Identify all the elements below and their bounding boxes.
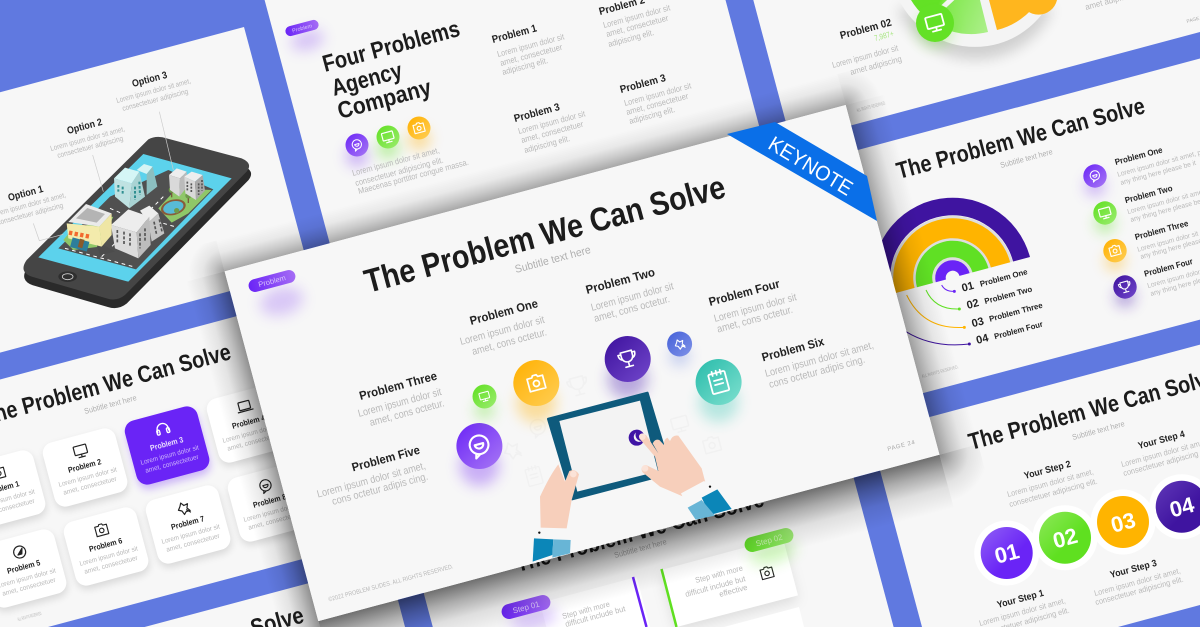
- ribbon: keynote: [727, 122, 877, 221]
- problem 3 left: amet, consectetuer: [520, 119, 584, 145]
- card: next step: [724, 607, 804, 627]
- copyright: ALL RIGHTS RESERVED.: [921, 364, 959, 380]
- tag pill: [247, 268, 306, 322]
- problem 3 right: amet, consectetuer: [625, 91, 689, 117]
- icon: green monitor large: [916, 4, 954, 47]
- step circle 03: 03: [1108, 507, 1138, 538]
- card: problem 3 highlighted: Lorem ipsum dolor sit: [140, 444, 200, 467]
- your step 2: Lorem ipsum dolor sit amet,: [1006, 467, 1094, 499]
- rainbow legend: Problem Four: [993, 320, 1044, 341]
- list item: problem one: any thing here please be it: [1120, 160, 1197, 187]
- option 2 label: consectetuer adipiscing: [56, 134, 124, 160]
- your step 2: consectetuer adipiscing elit.: [1008, 477, 1098, 509]
- your step 4: Your Step 4: [1137, 429, 1187, 452]
- tag pill: Problem: [257, 273, 287, 289]
- icon: orange circle: [1020, 0, 1057, 15]
- problem 2: Lorem ipsum dolor sit: [602, 2, 672, 30]
- option 3 label: [115, 70, 192, 113]
- problem 3 right: Problem 3: [619, 72, 667, 96]
- problem six: Problem Six: [760, 334, 826, 364]
- rainbow connector arcs: [906, 285, 971, 345]
- problem 3 right: [619, 72, 693, 126]
- ribbon: keynote: KEYNOTE: [764, 132, 857, 200]
- icon: orange camera: [408, 116, 430, 150]
- list item: problem one: Problem One: [1114, 145, 1164, 167]
- problem 1: adipiscing elit.: [501, 55, 549, 77]
- option 2 label: Lorem ipsum dolor sit amet,: [49, 124, 126, 153]
- card: problem 6: amet, consectetuer: [84, 555, 139, 576]
- donut chart: [897, 0, 1053, 59]
- card: step 02: effective: [718, 583, 749, 599]
- your step 4: [1120, 429, 1200, 478]
- card: step 02: [661, 537, 798, 627]
- problem 1: Lorem ipsum dolor sit: [496, 31, 566, 59]
- intro text: Maecenas porttitor congue massa.: [357, 157, 470, 196]
- card: problem 3 highlighted: [122, 404, 213, 492]
- card: problem 6: [61, 505, 152, 592]
- card: problem 7: amet, consectetuer: [166, 533, 221, 554]
- problem 3 right: Lorem ipsum dolor sit: [623, 80, 693, 108]
- heading: four problems agency company: [320, 15, 462, 124]
- title: The Problem We Can Solve: [360, 168, 729, 300]
- icon: green monitor: [376, 126, 400, 159]
- card: problem 7: [143, 483, 234, 570]
- your step 1: Lorem ipsum dolor sit amet,: [978, 596, 1066, 627]
- panel: card grid slide: [0, 295, 381, 627]
- problem four: Problem Four: [707, 276, 782, 309]
- card: step 02: Step with more: [694, 563, 744, 585]
- option 2 label: Option 2: [66, 117, 104, 137]
- problem 02 label: [831, 17, 903, 77]
- problem two: amet, cons octetur.: [593, 293, 671, 325]
- step circle 02: [1032, 505, 1098, 570]
- option 1 label: [0, 184, 67, 227]
- problem five: cons octetur adipis cing.: [331, 471, 429, 508]
- icon: teal clipboard: [696, 359, 742, 422]
- problem five: Problem Five: [350, 443, 422, 474]
- problem 3 left: [513, 101, 587, 155]
- problem two: Lorem ipsum dolor sit: [590, 280, 675, 314]
- problem two: [584, 265, 675, 325]
- rainbow legend: 02: [965, 297, 980, 312]
- problem 02 label: Lorem ipsum dolor sit: [831, 43, 900, 70]
- icon: green monitor: [1093, 201, 1117, 233]
- step circle 03: [1090, 490, 1156, 554]
- faint background icons: [503, 375, 722, 487]
- rainbow legend: 03: [970, 315, 985, 330]
- card: problem 5: Problem 5: [6, 558, 42, 576]
- problem 02 label: Problem 02: [839, 17, 893, 42]
- card: problem 1: [0, 448, 49, 535]
- problem four: [707, 276, 798, 335]
- step circle 04: 04: [1167, 492, 1198, 522]
- list item: problem two: Problem Two: [1124, 183, 1174, 205]
- subtitle: Subtitle text here: [1071, 419, 1126, 442]
- subtitle: Subtitle text here: [514, 244, 592, 276]
- problem 2: amet, consectetuer: [605, 13, 669, 39]
- step circle 02: 02: [1050, 523, 1080, 553]
- card: problem 4: Lorem ipsum dolor sit: [222, 422, 282, 445]
- icon: dark trophy: [1113, 275, 1137, 307]
- panel: step cards slide: [414, 440, 894, 627]
- problem 02 label: amet adipiscing: [849, 53, 903, 77]
- panel: bottom-left slide fragment: [145, 562, 405, 627]
- your step 1: Your Step 1: [996, 588, 1046, 611]
- icon: dark purple trophy: [605, 336, 651, 399]
- problem 2: [598, 0, 672, 49]
- intro text: Lorem ipsum dolor sit amet,: [351, 145, 440, 178]
- card: problem 8: amet, consectetuer: [248, 511, 303, 532]
- problem 3 left: adipiscing elit.: [523, 133, 571, 155]
- panel: numbered steps slide: [870, 345, 1200, 627]
- intro text: consectetuer adipiscing elit.: [354, 155, 444, 188]
- panel: main slide: [225, 105, 939, 621]
- list item: problem three: Problem Three: [1134, 218, 1190, 242]
- copyright: ©2022 PROBLEM SLIDES. ALL RIGHTS RESERVED.: [327, 562, 454, 603]
- rainbow legend: Problem One: [979, 267, 1029, 289]
- subtitle: Subtitle text here: [83, 393, 138, 416]
- icon: green monitor: [472, 384, 496, 420]
- card: problem 7: Problem 7: [170, 514, 206, 532]
- panel: four problems slide: [265, 0, 765, 263]
- panel: rainbow chart slide: [798, 58, 1200, 409]
- problem three: Problem Three: [358, 369, 439, 403]
- problem four: Lorem ipsum dolor sit: [713, 291, 798, 325]
- icon: orange camera: [1103, 239, 1127, 271]
- panel: card grid slide: ALL RIGHTS RESERVED.: [17, 611, 43, 623]
- copyright: ALL RIGHTS RESERVED.: [856, 100, 886, 114]
- option 3 label: Lorem ipsum dolor sit amet,: [115, 76, 192, 105]
- tag pill: [284, 18, 326, 55]
- heading: four problems agency company: Agency: [329, 57, 405, 101]
- pill: step 01: Step 01: [512, 599, 541, 615]
- card: step 02: difficult include but: [684, 574, 747, 599]
- card: problem 3 highlighted: Problem 3: [149, 435, 185, 453]
- icon: blue star: [667, 332, 692, 366]
- problem 3 right: adipiscing elit.: [628, 104, 676, 126]
- problem one: amet, cons octetur.: [471, 326, 548, 358]
- illustration: hands on tablet: [533, 393, 732, 562]
- problem five: [316, 443, 429, 508]
- problem 1: [491, 22, 566, 77]
- problem three: Lorem ipsum dolor sit: [357, 386, 443, 420]
- rainbow legend: [960, 267, 1044, 347]
- list item: problem four: Problem Four: [1143, 256, 1194, 279]
- card: problem 3 highlighted: amet, consectetuer: [145, 454, 200, 475]
- problem 1: amet, consectetuer: [499, 42, 563, 68]
- card: problem 6: Lorem ipsum dolor sit: [79, 545, 139, 568]
- your step 3: consectetuer adipiscing elit.: [1094, 575, 1184, 607]
- pill: step 02: [743, 526, 799, 569]
- tag pill: Problem: [292, 23, 313, 35]
- main slide shadow: [178, 64, 992, 627]
- step circle 01: 01: [992, 538, 1022, 569]
- problem six: Lorem ipsum dolor sit amet,: [764, 339, 875, 380]
- subtitle: Subtitle text here: [613, 537, 668, 560]
- card: step 01: Step with more: [561, 599, 611, 621]
- subtitle: Subtitle text here: [999, 147, 1054, 170]
- icon: orange camera: [513, 360, 559, 423]
- problem four: amet, cons octetur.: [716, 304, 794, 335]
- title: The Problem We Can Solve: [894, 92, 1148, 184]
- card: problem 2: [40, 426, 131, 513]
- problem three: [357, 369, 446, 429]
- step circle 04: [1149, 474, 1200, 539]
- problem two: Problem Two: [584, 265, 656, 297]
- card: problem 4: amet, consectetuer: [227, 432, 282, 453]
- problem one: [459, 296, 548, 358]
- problem 02 label: 7,987+: [873, 29, 895, 43]
- card: problem 8: Problem 8: [252, 492, 288, 510]
- heading: four problems agency company: Four Problems: [320, 15, 462, 77]
- your step 3: Your Step 3: [1109, 558, 1158, 581]
- option 2 label: [49, 117, 126, 160]
- card: problem 8: Lorem ipsum dolor sit: [243, 501, 303, 524]
- card: problem 4: Problem 4: [231, 413, 267, 431]
- icon: purple chat: [346, 134, 368, 167]
- rainbow legend: Problem Two: [983, 285, 1033, 306]
- pill: step 02: Step 02: [755, 532, 784, 548]
- problem 1: Problem 1: [491, 22, 538, 46]
- problem five: Lorem ipsum dolor sit amet,: [316, 460, 427, 500]
- card: problem 7: Lorem ipsum dolor sit: [161, 523, 221, 546]
- card: problem 5: [0, 527, 70, 614]
- rainbow legend: 04: [975, 332, 991, 347]
- problem 2: adipiscing elit.: [607, 27, 655, 49]
- problem one: Lorem ipsum dolor sit: [459, 314, 546, 348]
- title: The Problem We Can Solve: [513, 485, 767, 577]
- panel: phone options slide: [0, 27, 309, 353]
- card: step 01: [540, 577, 650, 627]
- pill: step 01: [500, 593, 559, 627]
- panel: donut slide: [753, 0, 1200, 141]
- card: problem 6: Problem 6: [88, 536, 124, 554]
- option 3 label: consectetuer adipiscing: [121, 87, 189, 113]
- card: problem 2: amet, consectetuer: [63, 476, 118, 497]
- card: problem 2: Lorem ipsum dolor sit: [58, 466, 118, 489]
- rainbow chart: [855, 180, 1030, 298]
- rainbow legend: 01: [960, 280, 975, 295]
- problem one: Problem One: [468, 296, 540, 328]
- icon: purple chat: [1083, 164, 1107, 196]
- option 1 label: Option 1: [7, 184, 45, 204]
- your step 2: Your Step 2: [1023, 459, 1072, 482]
- your step 3: [1093, 558, 1184, 607]
- option 3 label: Option 3: [131, 70, 169, 90]
- your step 2: [1006, 459, 1098, 509]
- heading: four problems agency company: Company: [335, 74, 434, 124]
- your step 3: Lorem ipsum dolor sit amet,: [1093, 566, 1181, 598]
- step circle 01: [974, 520, 1039, 586]
- problem six: [760, 334, 875, 391]
- page number: PAGE 24: [887, 440, 916, 453]
- card: problem 5: amet, consectetuer: [2, 577, 57, 598]
- phone city illustration: [23, 112, 250, 307]
- card: problem 8: [225, 461, 316, 548]
- problem six: cons octetur adipis cing.: [768, 354, 866, 391]
- problem 3 left: Problem 3: [513, 101, 561, 125]
- page label: PAGE: [1186, 16, 1200, 25]
- problem 3 left: Lorem ipsum dolor sit: [517, 108, 587, 136]
- icon: purple chat: [456, 423, 502, 486]
- rainbow legend: Problem Three: [988, 301, 1044, 324]
- card: problem 2: Problem 2: [67, 457, 103, 475]
- card: problem 4: [204, 382, 295, 469]
- problem three: amet, cons octetur.: [368, 397, 446, 429]
